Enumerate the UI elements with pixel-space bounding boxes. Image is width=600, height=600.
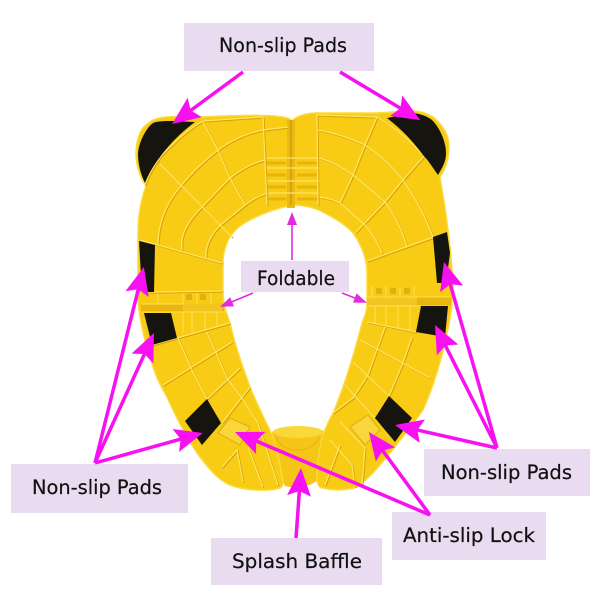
foldable hinge: left [141, 291, 228, 333]
label: foldable [241, 261, 349, 292]
label: anti-slip lock [392, 512, 546, 560]
arrows: right pads [401, 268, 497, 448]
foldable hinge: right [367, 286, 451, 331]
potty seat body [136, 111, 453, 490]
foldable hinge: centre [266, 120, 320, 208]
splash baffle [272, 426, 324, 487]
anti-slip lock: right [350, 415, 380, 445]
label: foldable: Foldable [257, 267, 335, 290]
arrow: splash baffle [296, 474, 301, 538]
label: left non-slip pads [11, 464, 188, 513]
label: right non-slip pads: Non-slip Pads [441, 461, 572, 484]
non-slip pads [138, 113, 450, 445]
ribs: upper left [140, 117, 288, 292]
label: top non-slip pads [184, 23, 374, 71]
ribs: lower left [152, 323, 278, 487]
label: right non-slip pads [424, 449, 590, 496]
label: splash baffle [211, 538, 382, 585]
ribs: lower right [325, 322, 430, 487]
arrows: left pads [95, 273, 197, 463]
label: left non-slip pads: Non-slip Pads [32, 476, 162, 499]
ribs: upper right [317, 114, 434, 261]
arrows: top pads [177, 72, 415, 120]
label: top non-slip pads: Non-slip Pads [219, 34, 347, 57]
arrows: anti-slip lock [240, 434, 430, 515]
anti-slip lock: left [218, 418, 250, 445]
label: anti-slip lock: Anti-slip Lock [403, 524, 536, 547]
label: splash baffle: Splash Baffle [232, 550, 362, 573]
arrows: foldable [222, 214, 365, 306]
